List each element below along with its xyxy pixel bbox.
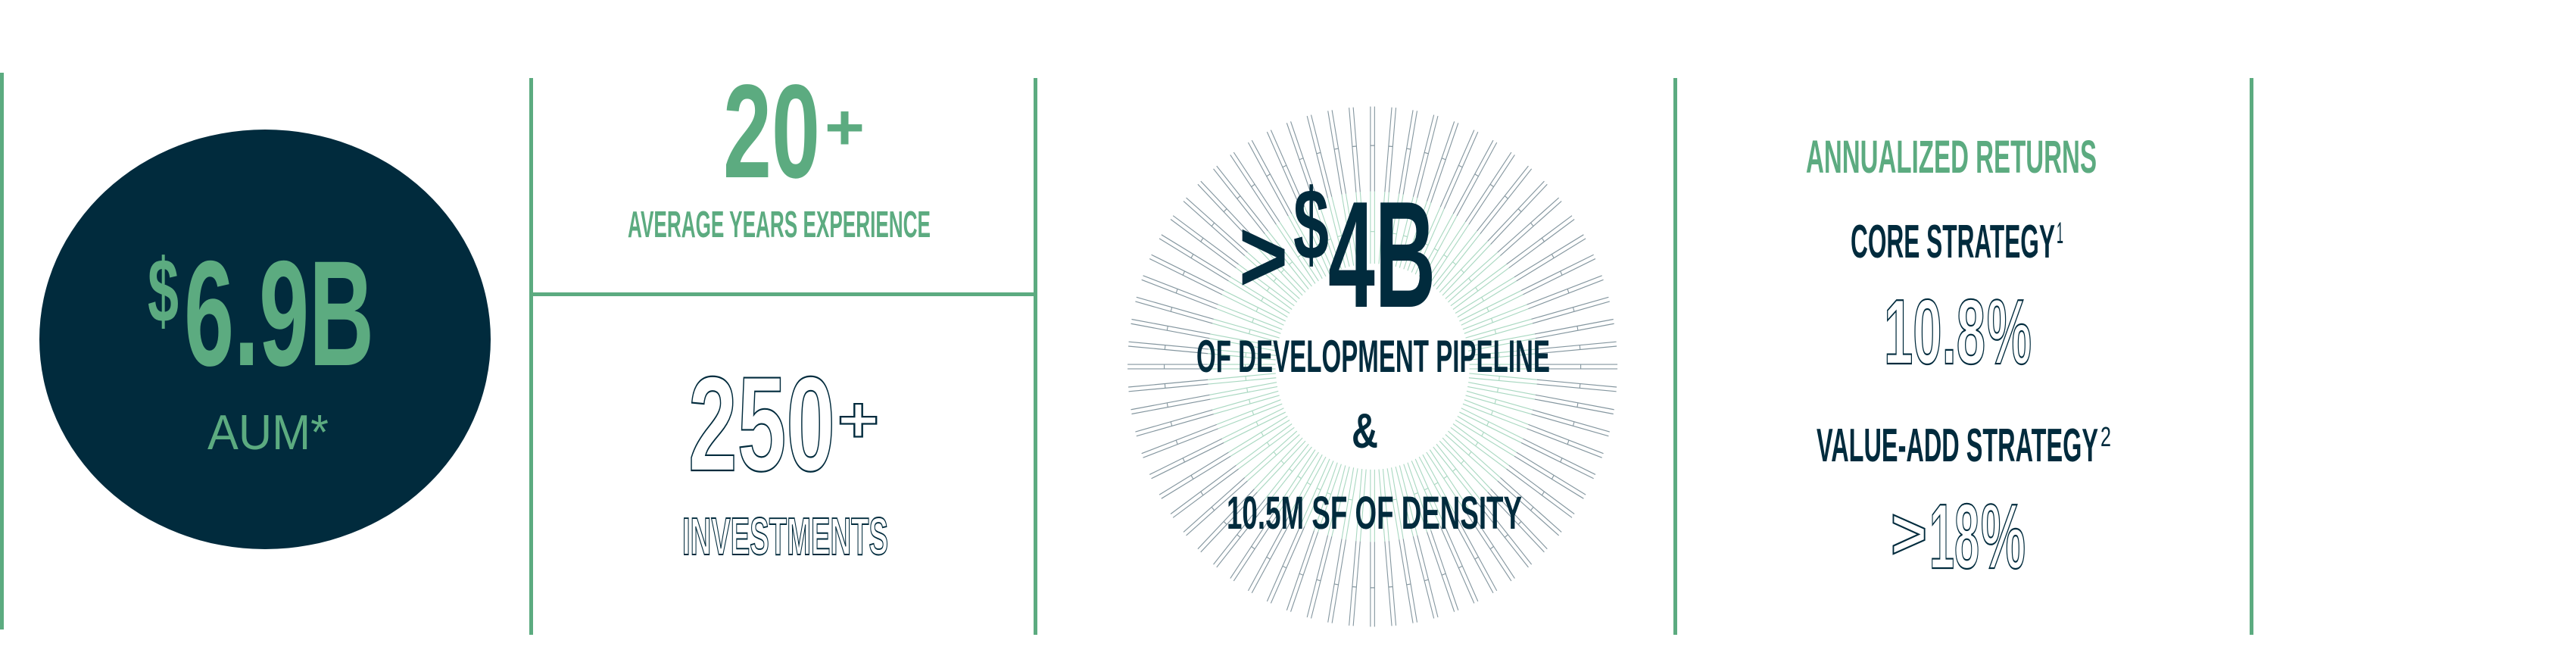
stat: 20+: + (825, 92, 865, 164)
stat: 10.8%: % (1987, 280, 2032, 383)
heading: annualized returns: ANNUALIZED RETURNS (1806, 131, 2097, 183)
label: investments: INVESTMENTS (682, 507, 888, 566)
sunburst (1087, 64, 1658, 656)
stat: >$4B (1239, 169, 1436, 339)
label: core strategy (1851, 216, 2063, 268)
stat: 250+: 250 (688, 348, 835, 499)
stat: >18%: 18 (1929, 485, 1979, 588)
label: average years experience: AVERAGE YEARS EXPERIENCE (628, 205, 931, 245)
stat: 250+: + (837, 384, 879, 456)
panel: investments (682, 348, 888, 566)
label: value-add strategy (1817, 420, 2111, 472)
stat: >$4B: 4B (1328, 170, 1436, 339)
stat: 10.8%: 10.8 (1884, 280, 1985, 383)
label: core strategy: CORE STRATEGY (1851, 216, 2055, 268)
stat: $6.9B: 6.9B (184, 230, 374, 397)
ampersand: & (1352, 403, 1378, 458)
stat: $6.9B: $ (148, 240, 179, 342)
panel: annualized returns (1806, 131, 2111, 588)
stat: 20+: 20 (723, 58, 820, 206)
label: value-add strategy: 2 (2100, 421, 2111, 452)
label: AUM: AUM* (207, 405, 329, 460)
label: density: 10.5M SF OF DENSITY (1227, 487, 1522, 539)
panel: years experience (628, 58, 931, 245)
stat: >18%: > (1891, 493, 1927, 574)
label: of development pipeline: OF DEVELOPMENT PIPELINE (1196, 331, 1550, 382)
label: value-add strategy: VALUE-ADD STRATEGY (1817, 420, 2098, 472)
stat: >18%: % (1981, 485, 2026, 588)
stat: $6.9B (148, 230, 374, 397)
stat: >18% (1891, 485, 2026, 588)
stat: >$4B: > (1239, 198, 1288, 314)
stat: >$4B: $ (1293, 169, 1329, 281)
navy circle (39, 130, 491, 549)
panel: annualized returns: 1 (2057, 217, 2063, 250)
panel: assets under management (39, 130, 491, 549)
panel: development pipeline (1087, 64, 1658, 656)
